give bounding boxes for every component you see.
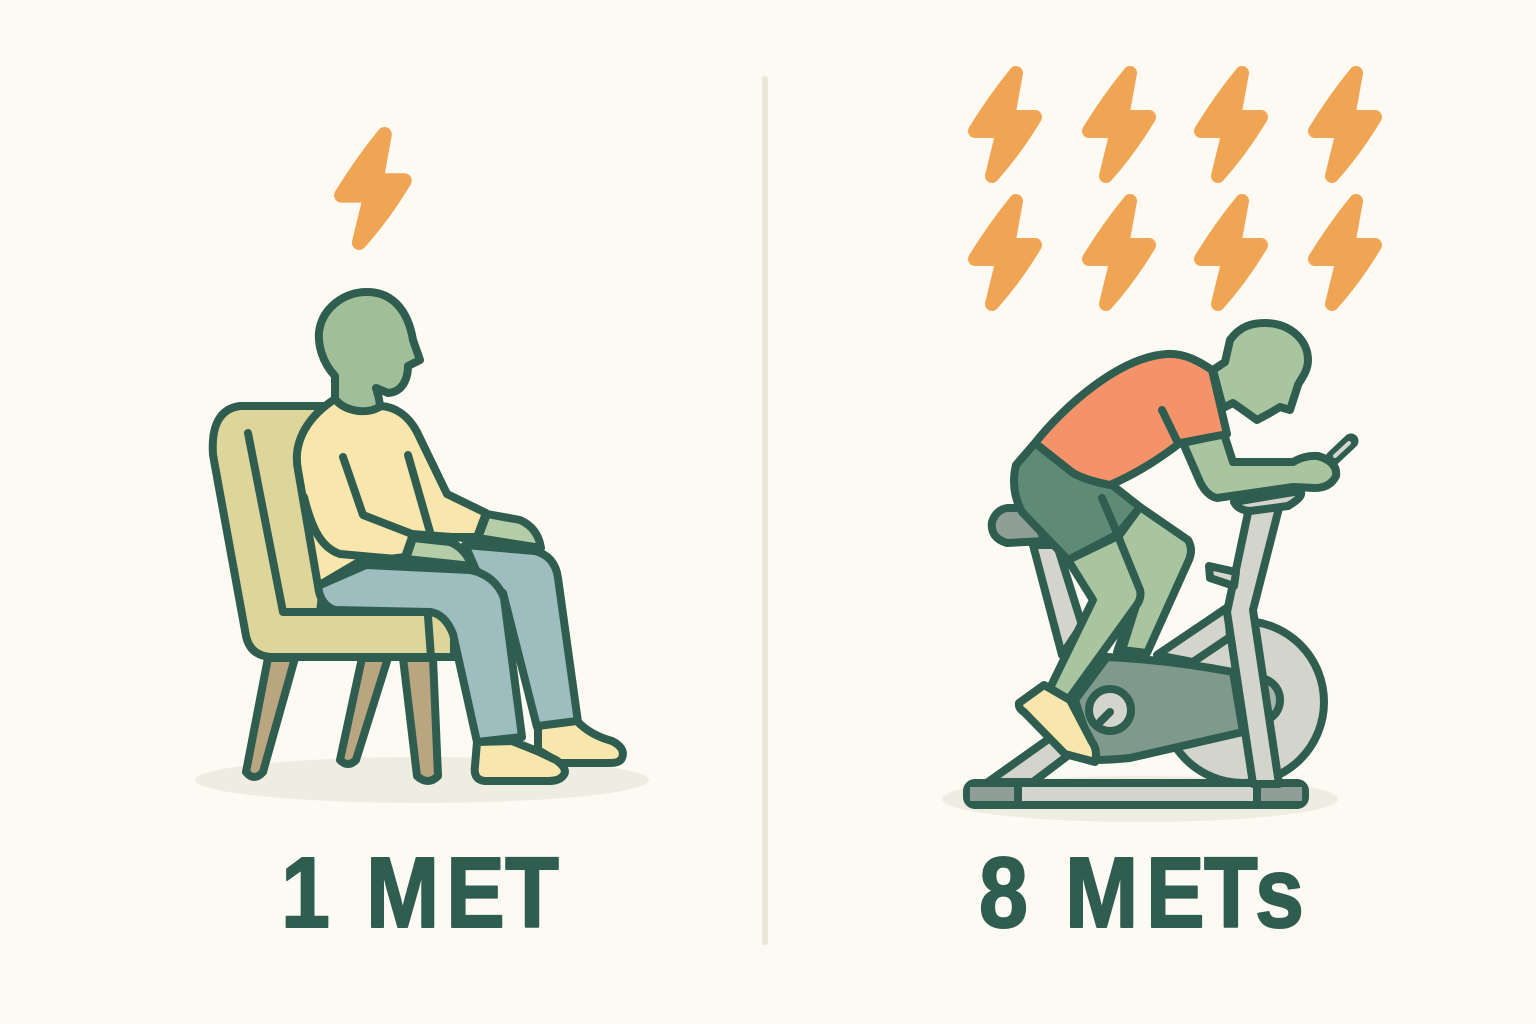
crank bbox=[1089, 689, 1131, 731]
flywheel bbox=[1162, 621, 1324, 783]
shorts seam bbox=[1102, 498, 1118, 535]
knob bbox=[1209, 566, 1236, 586]
front strut bbox=[988, 738, 1070, 782]
torso and sweater bbox=[297, 399, 486, 586]
chair bbox=[213, 406, 454, 657]
ground shadow under chair bbox=[195, 757, 649, 803]
upright post bbox=[1227, 508, 1279, 784]
ground shadow under bike bbox=[942, 776, 1338, 822]
icon: single energy bolt bbox=[341, 134, 404, 243]
near hand bbox=[406, 538, 472, 566]
near leg bbox=[1050, 536, 1140, 700]
near shoe bbox=[475, 741, 565, 781]
sweater fold lines bbox=[304, 455, 478, 560]
chair legs bbox=[246, 658, 438, 781]
sleeve line bbox=[1162, 410, 1178, 443]
far leg bbox=[465, 545, 578, 727]
panel: 8 METs bbox=[942, 73, 1375, 948]
head bbox=[319, 292, 420, 415]
seat bbox=[992, 508, 1045, 543]
handlebar platform bbox=[1234, 491, 1301, 511]
base bar bbox=[967, 783, 1305, 805]
shoe bbox=[1019, 685, 1096, 762]
near leg bbox=[318, 565, 522, 742]
head bbox=[1213, 323, 1308, 420]
person on exercise bike illustration bbox=[967, 323, 1351, 805]
label: 8 METs: 8 METs bbox=[979, 837, 1304, 948]
rear strut bbox=[1157, 607, 1230, 662]
far hand bbox=[478, 514, 541, 548]
icon: eight energy bolts bbox=[975, 73, 1375, 304]
seated person on chair illustration bbox=[213, 292, 623, 781]
shorts bbox=[1014, 443, 1140, 560]
shirt bbox=[1035, 354, 1227, 485]
label: 1 MET: 1 MET bbox=[281, 837, 559, 948]
handle grip bbox=[1333, 441, 1351, 458]
seat post bbox=[1033, 545, 1082, 655]
far leg bbox=[1118, 507, 1191, 653]
far shoe bbox=[538, 721, 623, 763]
panel: 1 MET bbox=[195, 134, 649, 948]
chain guard bbox=[1075, 657, 1243, 760]
frame piece behind legs bbox=[1117, 556, 1147, 652]
arm bbox=[1183, 434, 1336, 498]
